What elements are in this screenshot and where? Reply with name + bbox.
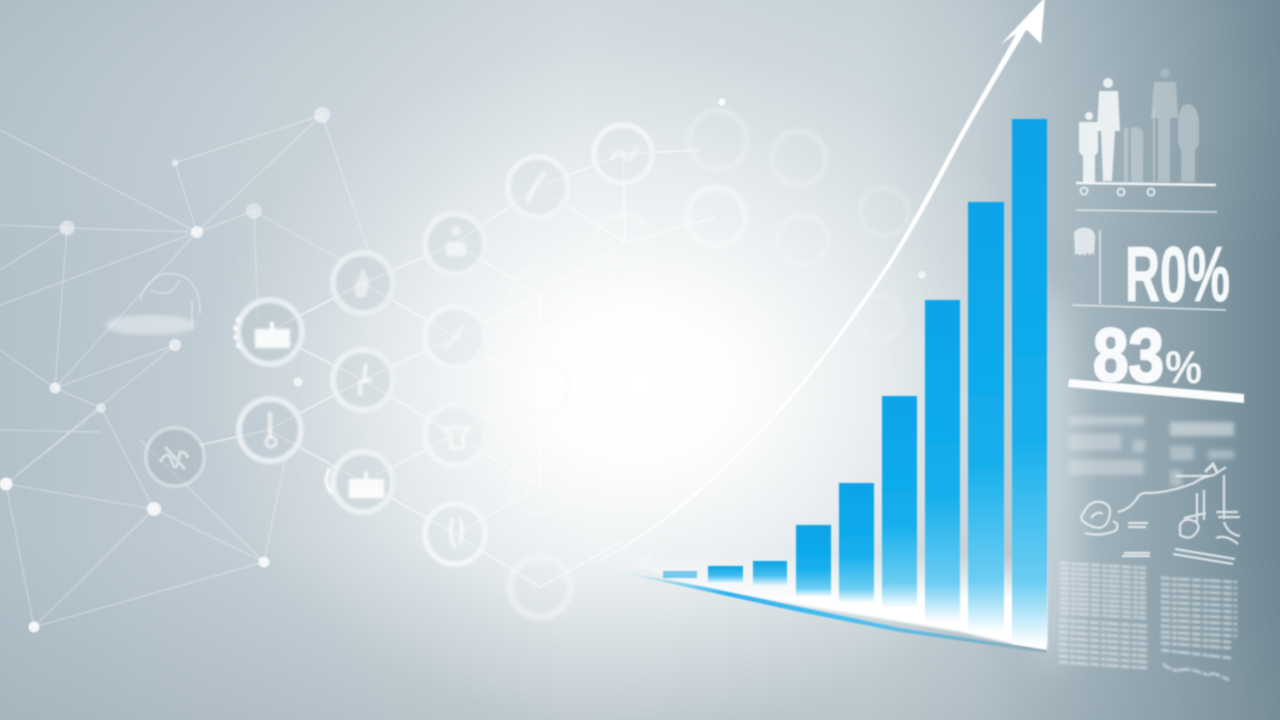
people chart [1076, 68, 1217, 212]
chart base plane [600, 552, 1047, 652]
node: basket [425, 405, 485, 465]
sketch diagram [1081, 464, 1240, 564]
small bar icon [1072, 228, 1226, 310]
node: briefcase lower [326, 452, 393, 512]
faint person sketch [140, 274, 200, 330]
growth arrow [585, 0, 1045, 567]
icon nodes [235, 125, 652, 564]
stat: 83%: % [1165, 341, 1202, 393]
node: key [239, 399, 301, 461]
node: person [425, 214, 485, 274]
hexagonal links [200, 150, 716, 587]
faint headings [1069, 416, 1234, 486]
node: gear [333, 253, 393, 313]
network nodes [0, 98, 926, 632]
node: lady [425, 504, 485, 564]
faint nodes [510, 111, 908, 617]
node: tools [425, 307, 485, 367]
node: briefcase upper [235, 300, 302, 364]
faint globe node [146, 428, 204, 486]
cloud smudge [105, 315, 195, 335]
node: cluster [594, 125, 652, 183]
stat: 83%: 83 [1093, 313, 1164, 397]
network mesh: left [0, 98, 926, 632]
right data panel [1059, 68, 1244, 680]
paragraph text [1059, 563, 1237, 680]
arrow head [1001, 0, 1045, 44]
chart base edge [615, 571, 1047, 653]
bar chart [663, 119, 1047, 645]
node: chart [508, 157, 568, 217]
thick divider [1068, 379, 1244, 403]
node: figure [333, 350, 393, 410]
